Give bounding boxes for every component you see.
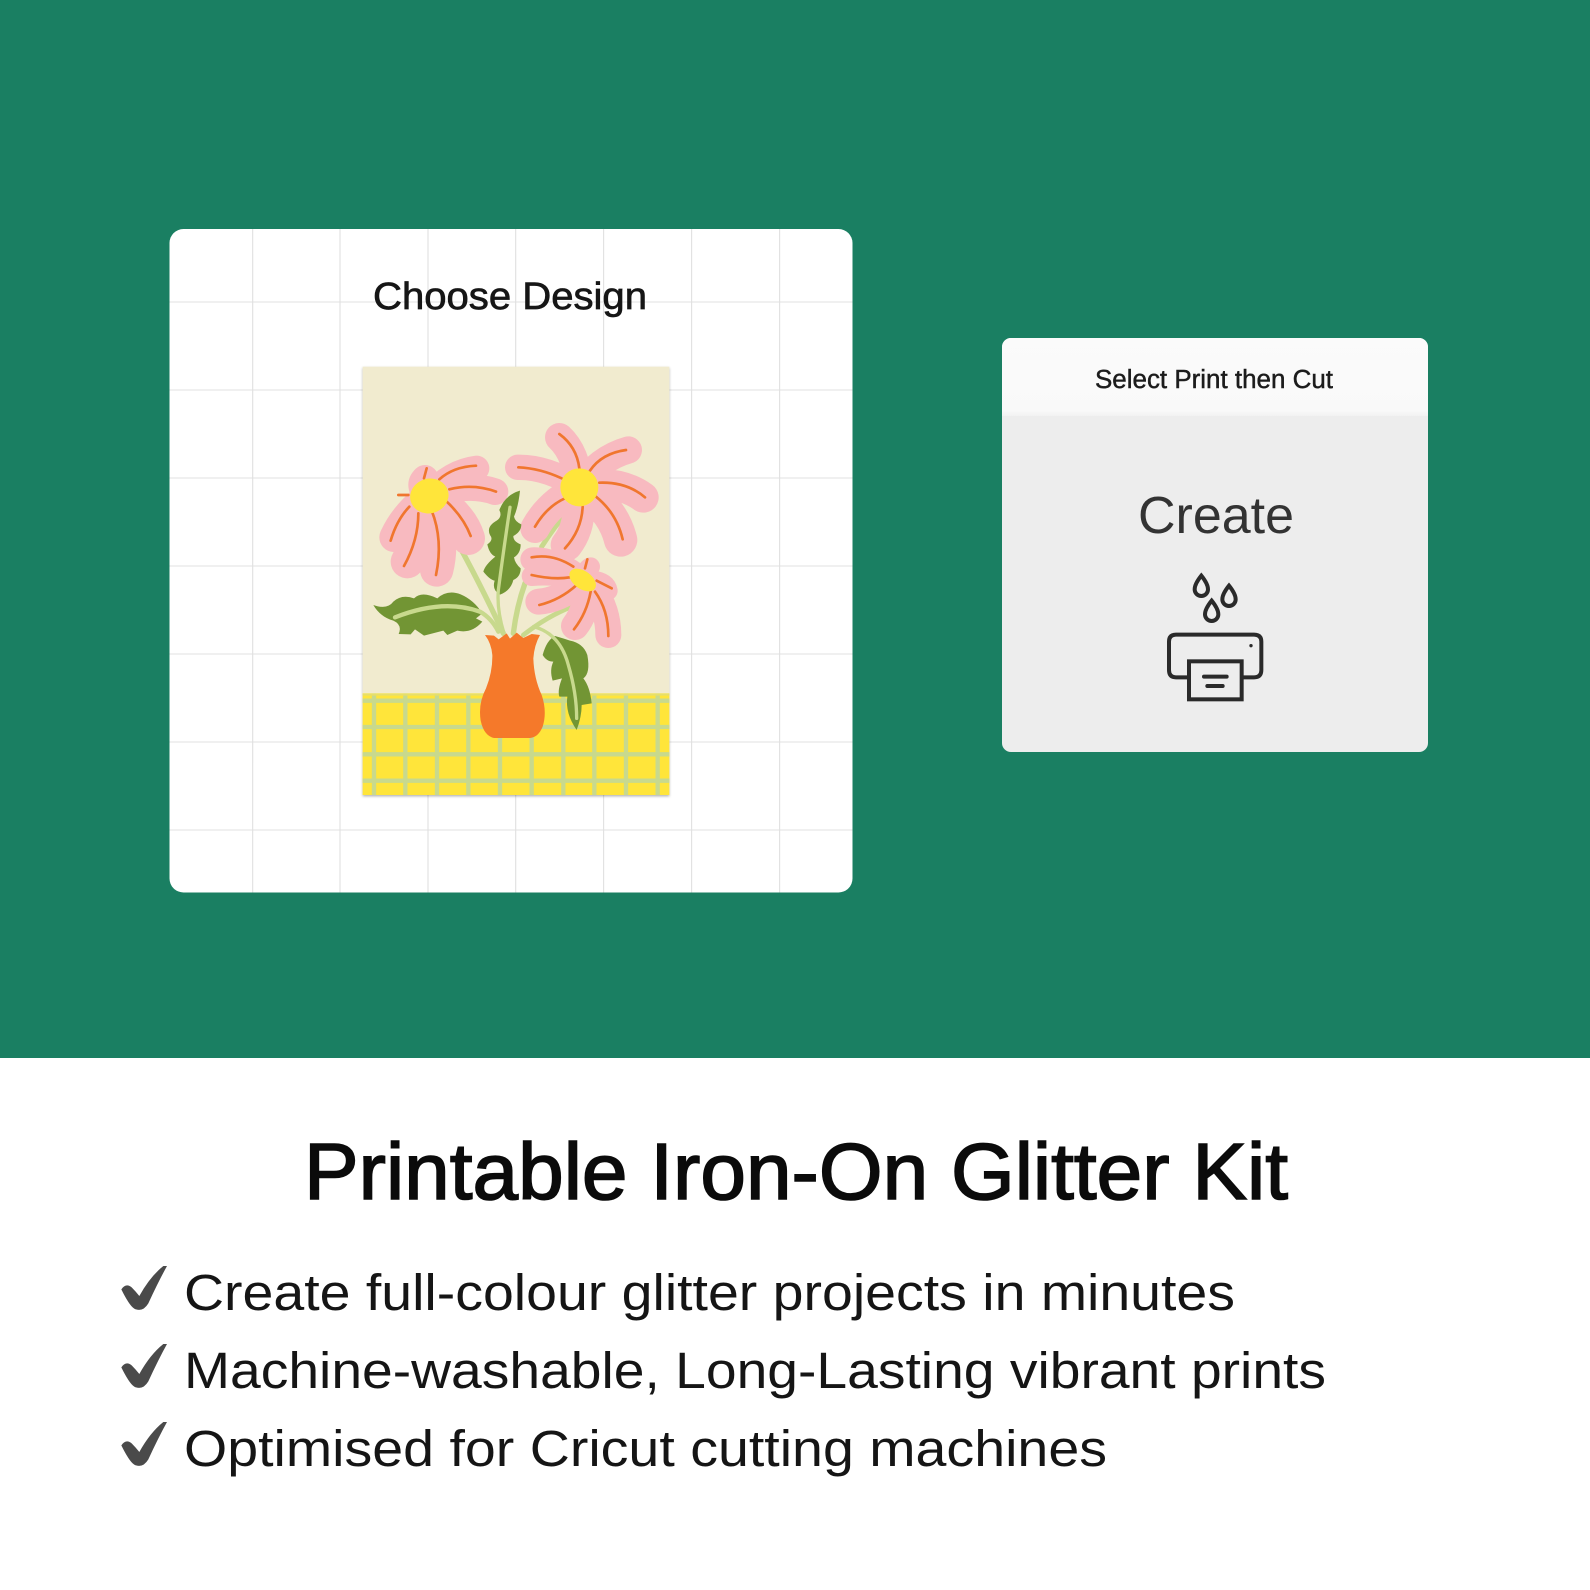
flower: left: [391, 466, 496, 575]
checked tablecloth: [363, 693, 669, 795]
feature 1: Create full-colour glitter projects in minutes: [184, 1264, 1235, 1321]
leaf: right: [533, 627, 592, 730]
icon: printer with ink drops: [1169, 576, 1261, 699]
feature 2: Machine-washable, Long-Lasting vibrant prints: [184, 1342, 1326, 1399]
feature 3: Optimised for Cricut cutting machines: [184, 1420, 1107, 1477]
vase: [480, 633, 545, 738]
feature list: [121, 1264, 1326, 1477]
icon: check 1: [121, 1266, 167, 1310]
panel header: [1002, 338, 1428, 416]
leaf: left: [373, 593, 498, 636]
panel: select print then cut: [1002, 338, 1428, 752]
panel: choose design: [169, 229, 853, 893]
green background panel: [0, 0, 1590, 1058]
heading: choose design: Choose Design: [373, 276, 647, 318]
heading: select print then cut: Select Print then Cut: [1095, 366, 1333, 394]
flower: bottom right: [532, 556, 612, 636]
title: Printable Iron-On Glitter Kit: [304, 1127, 1288, 1216]
icon: check 2: [121, 1344, 167, 1388]
illustration: flowers in vase: [363, 367, 669, 795]
stems: [455, 508, 572, 635]
leaf: centre: [483, 491, 521, 633]
icon: check 3: [121, 1422, 167, 1466]
label: create: Create: [1138, 487, 1294, 545]
flower: top right: [518, 434, 645, 548]
